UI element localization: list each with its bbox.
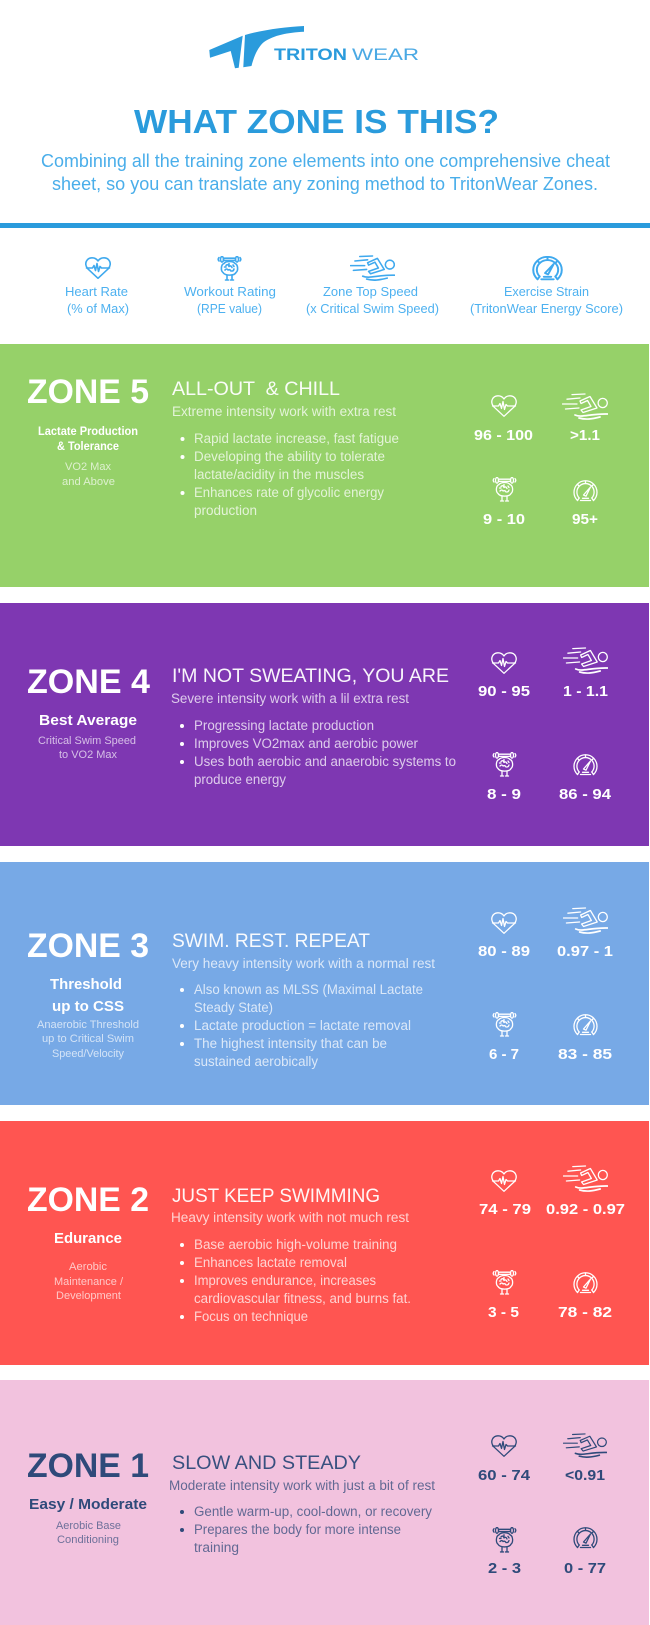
legend: workout rating: Workout Rating: [184, 284, 276, 299]
zone 2 bullets: Improves endurance, increases: [194, 1273, 376, 1288]
legend: heart rate: (% of Max): [67, 301, 129, 316]
zone 2 title: JUST KEEP SWIMMING: [172, 1185, 380, 1207]
zone 3 heading: ZONE 3: [27, 927, 149, 965]
zone 1 description: Aerobic Base: [56, 1520, 121, 1532]
zone 3 description: up to Critical Swim: [42, 1033, 134, 1045]
zone 2 description: Development: [56, 1290, 121, 1302]
zone 4 metrics: 1 - 1.1: [563, 683, 608, 700]
zone 3 metrics: 80 - 89: [478, 943, 530, 960]
zone 4 description: Best Average: [39, 713, 137, 729]
zone 1 title: SLOW AND STEADY: [172, 1452, 361, 1474]
zone 3 description: up to CSS: [52, 999, 124, 1015]
zone 1 description: Easy / Moderate: [29, 1497, 147, 1513]
zone 4 metrics: 90 - 95: [478, 683, 530, 700]
zone 2 metrics: [479, 1166, 625, 1321]
legend: workout rating: [184, 256, 276, 316]
zone 5 metrics: >1.1: [570, 427, 600, 444]
legend: exercise strain: (TritonWear Energy Score): [470, 301, 623, 316]
zone 5 description: VO2 Max: [65, 461, 111, 473]
header divider: [0, 223, 650, 228]
zone 2 description: Aerobic: [69, 1261, 108, 1273]
logo: TritonWear: [209, 26, 419, 68]
zone 4 metrics: [478, 648, 612, 803]
zone 2 metrics: 0.92 - 0.97: [546, 1201, 625, 1218]
zone 2 metrics: 74 - 79: [479, 1201, 531, 1218]
zone 5 metrics: [474, 394, 608, 528]
legend: exercise strain: Exercise Strain: [504, 284, 589, 299]
panel: zone 3: [0, 862, 649, 1105]
zone 3 metrics: 0.97 - 1: [557, 943, 613, 960]
zone 3 description: Speed/Velocity: [52, 1048, 124, 1060]
zone 3 description: [37, 977, 139, 1060]
zone 4 subtitle: Severe intensity work with a lil extra rest: [171, 691, 409, 706]
zone 2 subtitle: Heavy intensity work with not much rest: [171, 1210, 409, 1225]
zone 3 bullets: sustained aerobically: [194, 1054, 318, 1069]
zone 4 bullets: Uses both aerobic and anaerobic systems to: [194, 754, 456, 769]
legend: exercise strain: [470, 257, 623, 316]
panel: zone 5: [0, 344, 649, 587]
subtitle: sheet, so you can translate any zoning method to TritonWear Zones.: [52, 174, 598, 194]
zone 5 bullets: Rapid lactate increase, fast fatigue: [194, 431, 399, 446]
zone 1 heading: ZONE 1: [27, 1447, 149, 1485]
zone 2 bullets: Focus on technique: [194, 1309, 308, 1324]
zone 4 description: to VO2 Max: [59, 749, 117, 761]
zone 1 metrics: 60 - 74: [478, 1467, 531, 1484]
zone 3 bullets: [180, 982, 423, 1069]
zone 1 metrics: [478, 1434, 607, 1577]
zone 5 bullets: Developing the ability to tolerate: [194, 449, 385, 464]
zone 2 bullets: Enhances lactate removal: [194, 1255, 347, 1270]
zone 3 bullets: Steady State): [194, 1000, 273, 1015]
logo: TritonWear: WEAR: [352, 45, 419, 64]
zone 2 bullets: cardiovascular fitness, and burns fat.: [194, 1291, 411, 1306]
zone 3 metrics: [478, 908, 613, 1063]
zone 4 bullets: Improves VO2max and aerobic power: [194, 736, 419, 751]
zone 2 metrics: 78 - 82: [558, 1304, 612, 1321]
zone 3 bullets: Lactate production = lactate removal: [194, 1018, 411, 1033]
zone 4 description: [38, 713, 137, 761]
zone 4 bullets: Progressing lactate production: [194, 718, 374, 733]
zone 5 description: [38, 426, 138, 488]
title: WHAT ZONE IS THIS?: [134, 103, 499, 140]
zone 3 metrics: 6 - 7: [489, 1046, 519, 1063]
zone 3 description: Anaerobic Threshold: [37, 1019, 139, 1031]
zone 1 subtitle: Moderate intensity work with just a bit of rest: [169, 1478, 435, 1493]
zone 4 bullets: produce energy: [194, 772, 286, 787]
zone 1 metrics: 2 - 3: [488, 1560, 521, 1577]
zone 5 heading: ZONE 5: [27, 373, 149, 411]
panel: zone 4: [0, 603, 649, 846]
zone 5 bullets: [180, 431, 399, 518]
zone 5 subtitle: Extreme intensity work with extra rest: [172, 404, 396, 419]
zone 2 bullets: Base aerobic high-volume training: [194, 1237, 397, 1252]
zone 1 description: [29, 1497, 147, 1546]
zone 4 title: I'M NOT SWEATING, YOU ARE: [172, 665, 449, 687]
zone 3 subtitle: Very heavy intensity work with a normal rest: [172, 956, 435, 971]
panel: zone 1: [0, 1380, 649, 1625]
legend: [65, 256, 623, 316]
zone 2 description: Maintenance /: [54, 1276, 124, 1288]
logo: TritonWear: TRITON: [274, 45, 347, 64]
panel: zone 2: [0, 1121, 649, 1365]
zone 5 description: & Tolerance: [57, 441, 119, 453]
zone 2 metrics: 3 - 5: [488, 1304, 519, 1321]
zone 4 metrics: 86 - 94: [559, 786, 612, 803]
subtitle: Combining all the training zone elements into one comprehensive cheat: [41, 151, 610, 171]
legend: workout rating: (RPE value): [197, 301, 262, 316]
zone 5 metrics: 95+: [572, 511, 598, 528]
legend: zone top speed: [306, 256, 439, 316]
zone 1 bullets: [180, 1504, 432, 1555]
zone 3 title: SWIM. REST. REPEAT: [172, 930, 370, 952]
zone 3 bullets: The highest intensity that can be: [194, 1036, 387, 1051]
zone 1 bullets: training: [194, 1540, 239, 1555]
zone 1 description: Conditioning: [57, 1534, 119, 1546]
legend: zone top speed: (x Critical Swim Speed): [306, 301, 439, 316]
subtitle: [41, 151, 610, 194]
zone 4 heading: ZONE 4: [27, 663, 150, 701]
zone 3 bullets: Also known as MLSS (Maximal Lactate: [194, 982, 423, 997]
zone 5 title: ALL-OUT & CHILL: [172, 378, 340, 400]
zone 5 description: Lactate Production: [38, 426, 138, 438]
zone 2 description: [54, 1231, 124, 1302]
zone 5 metrics: 96 - 100: [474, 427, 533, 444]
zone 1 metrics: 0 - 77: [564, 1560, 606, 1577]
zone 2 description: Edurance: [54, 1231, 122, 1247]
zone 3 metrics: 83 - 85: [558, 1046, 612, 1063]
zone 4 description: Critical Swim Speed: [38, 735, 136, 747]
zone 2 heading: ZONE 2: [27, 1181, 149, 1219]
zone 4 metrics: 8 - 9: [487, 786, 521, 803]
zone 1 bullets: Prepares the body for more intense: [194, 1522, 401, 1537]
zone 5 bullets: production: [194, 503, 257, 518]
zone 5 bullets: lactate/acidity in the muscles: [194, 467, 364, 482]
zone 2 bullets: [180, 1237, 411, 1324]
zone 5 bullets: Enhances rate of glycolic energy: [194, 485, 384, 500]
zone 1 metrics: <0.91: [565, 1467, 605, 1484]
legend: zone top speed: Zone Top Speed: [323, 284, 418, 299]
zone 5 description: and Above: [62, 476, 115, 488]
legend: heart rate: Heart Rate: [65, 284, 128, 299]
zone 5 metrics: 9 - 10: [483, 511, 525, 528]
zone 3 description: Threshold: [50, 977, 122, 993]
legend: heart rate: [65, 258, 129, 316]
zone 1 bullets: Gentle warm-up, cool-down, or recovery: [194, 1504, 432, 1519]
zone 4 bullets: [180, 718, 456, 787]
